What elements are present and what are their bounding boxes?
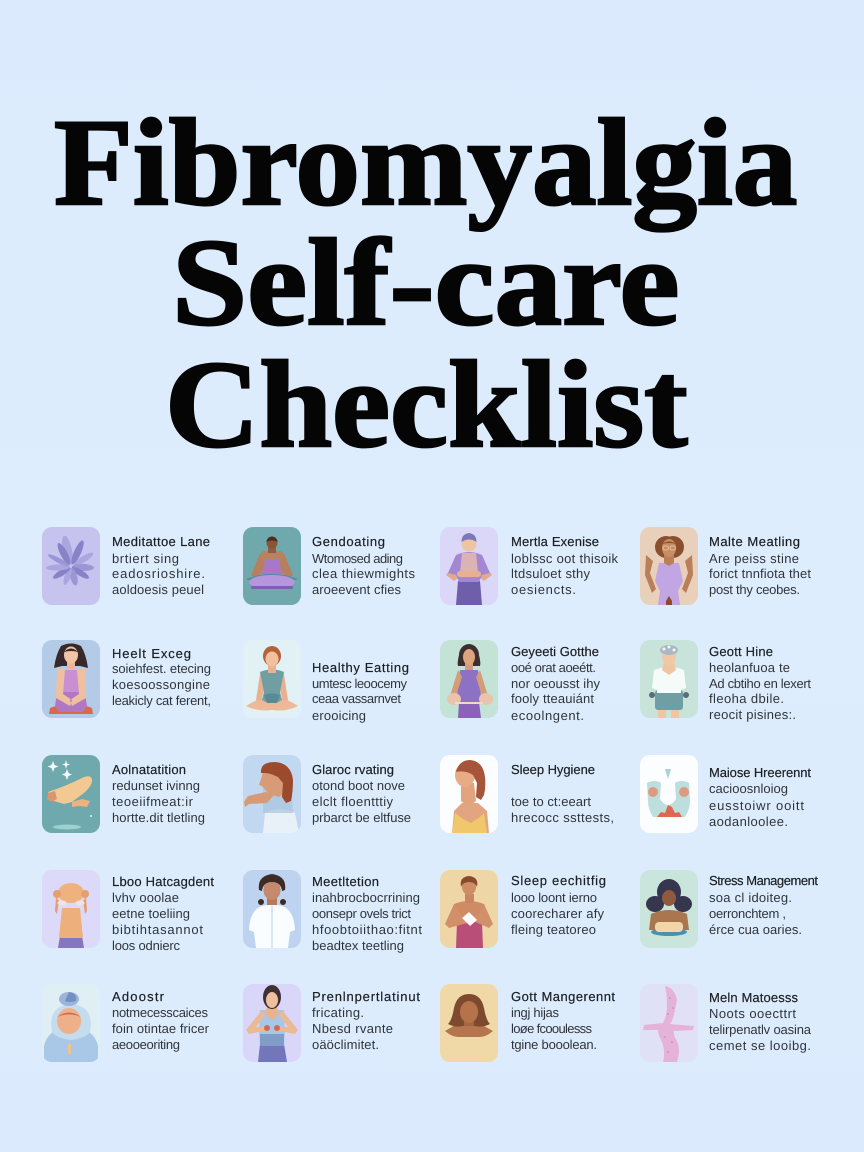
item: figure beige — [640, 527, 811, 605]
text: item 1: aoldoesis peuel — [112, 582, 204, 597]
text: item 17: foin otintae fricer — [112, 1021, 210, 1036]
item: meditation coat — [243, 870, 422, 953]
text: item 14: beadtex teetling — [312, 938, 404, 953]
text: item 7: ecoolngent. — [511, 708, 584, 723]
icon: teal bowls and coral shapes — [640, 755, 698, 833]
item: meditation flower — [42, 527, 210, 605]
item: kneeling woman — [42, 640, 211, 718]
text: item 15: looo loont ierno — [511, 890, 597, 905]
text: item 10 — [312, 762, 411, 825]
text: item 13: lvhv ooolae — [112, 890, 179, 905]
icon: hooded person with blue wrap — [42, 984, 100, 1062]
text: item 12: Maiose Hreerennt — [709, 765, 811, 780]
text: item 16: Stress Management — [709, 873, 818, 888]
text: item 13: eetne toeliing — [112, 906, 190, 921]
item: sparkle limb — [42, 755, 205, 833]
text: item 10: prbarct be eltfuse — [312, 810, 411, 825]
text: item 5: soiehfest. etecing — [112, 661, 211, 676]
text: item 4: Are peiss stine — [709, 551, 799, 566]
text: item 14 — [312, 874, 422, 953]
text: item 11 — [511, 762, 614, 825]
text: item 1 — [112, 534, 210, 597]
text: item 4: forict tnnfiota thet — [709, 566, 811, 581]
text: item 19: tgine booolean. — [511, 1037, 597, 1052]
text: item 20: telirpenatlv oasina — [709, 1022, 812, 1037]
text: item 16: oerronchtem , — [709, 906, 786, 921]
item: profile woman — [243, 755, 411, 833]
text: item 10: Glaroc rvating — [312, 762, 394, 777]
icon: peach face with hands — [42, 870, 100, 948]
text: item 11: hrecocc ssttests, — [511, 810, 614, 825]
text: item 3 — [511, 534, 618, 597]
text: item 9: redunset ivinng — [112, 778, 200, 793]
text: item 9: teoeiifmeat:ir — [112, 794, 194, 809]
text: item 7: ooé orat aoeétt. — [511, 660, 596, 675]
text: item 3: Mertla Exenise — [511, 534, 599, 549]
item: prenatal woman — [243, 984, 420, 1062]
item: hooded person — [42, 984, 210, 1062]
item: sleep scheduling — [440, 870, 606, 948]
text: item 2: Wtomosed ading — [312, 551, 403, 566]
icon: teal seated figure — [243, 527, 301, 605]
text: item 8: fleoha dbile. — [709, 691, 784, 706]
text: item 19: Gott Mangerennt — [511, 989, 615, 1004]
text: item 14: oonsepr ovels trict — [312, 906, 411, 921]
text: item 9: Aolnatatition — [112, 762, 186, 777]
item: sleep hygiene — [440, 755, 614, 833]
text: item 8: Ad cbtiho en lexert — [709, 676, 811, 691]
text: item 11: toe to ct:eeart — [511, 794, 591, 809]
text: item 20: Meln Matoesss — [709, 990, 798, 1005]
text: item 7: Geyeeti Gotthe — [511, 644, 599, 659]
text: item 4: post thy ceobes. — [709, 582, 800, 597]
icon: peach limb with sparkles — [42, 755, 100, 833]
title: Checklist — [165, 335, 688, 473]
text: item 15: coorecharer afy — [511, 906, 604, 921]
text: item 6: Healthy Eatting — [312, 660, 409, 675]
text: item 20: Noots ooecttrt — [709, 1006, 796, 1021]
icon: lavender flower — [42, 527, 100, 605]
text: item 20: cemet se looibg. — [709, 1038, 811, 1053]
text: item 12 — [709, 765, 811, 829]
title — [54, 94, 797, 473]
text: item 6: umtesc leoocemy — [312, 676, 408, 691]
icon: dark-haired woman with cushion — [640, 870, 698, 948]
text: item 18 — [312, 989, 420, 1052]
text: item 13 — [112, 874, 214, 953]
text: item 15: fleing teatoreo — [511, 922, 596, 937]
item: healthy eating — [243, 640, 409, 723]
icon: kneeling woman on red cushion — [42, 640, 100, 718]
text: item 13: bibtihtasannot — [112, 922, 203, 937]
title: Self-care — [172, 214, 679, 352]
text: item 12: aodanloolee. — [709, 814, 788, 829]
text: item 14: Meetltetion — [312, 874, 379, 889]
text: item 12: eusstoiwr ooitt — [709, 798, 804, 813]
text: item 20 — [709, 990, 812, 1053]
text: item 8 — [709, 644, 811, 722]
text: item 15 — [511, 873, 606, 937]
text: item 2: aroeevent cfies — [312, 582, 402, 597]
text: item 10: otond boot nove — [312, 778, 405, 793]
text: item 17: Adoostr — [112, 989, 165, 1004]
text: item 2: Gendoating — [312, 534, 385, 549]
text: item 16: soa cl idoiteg. — [709, 890, 792, 905]
text: item 6: ceaa vassarnvet — [312, 691, 401, 706]
text: item 8: heolanfuoa te — [709, 660, 790, 675]
icon: pink speckled ribbon — [640, 984, 698, 1062]
text: item 1: eadosrioshire. — [112, 566, 205, 581]
title: Fibromyalgia — [54, 94, 797, 231]
text: item 3: ltdsuloet sthy — [511, 566, 590, 581]
text: item 19: ingj hijas — [511, 1005, 560, 1020]
item: pink ribbon — [640, 984, 812, 1062]
text: item 1: Meditattoe Lane — [112, 534, 210, 549]
text: item 7: nor oeousst ihy — [511, 676, 600, 691]
text: item 16 — [709, 873, 818, 937]
item: gout management — [440, 984, 615, 1062]
item: figure lavender purple shirt — [440, 527, 618, 605]
item: woman holding bowls — [440, 640, 600, 723]
icon: curly-haired person in white coat — [243, 870, 301, 948]
text: item 5: koesoossongine — [112, 677, 210, 692]
text: item 3: loblssc oot thisoik — [511, 551, 618, 566]
text: item 15: Sleep eechitfig — [511, 873, 606, 888]
text: item 5 — [112, 646, 211, 708]
text: item 5: Heelt Exceg — [112, 646, 191, 661]
text: item 19: loøe fcooulesss — [511, 1021, 592, 1036]
text: item 19 — [511, 989, 615, 1052]
item: seated figure teal — [243, 527, 416, 605]
text: item 14: inahbrocbocrrining — [312, 890, 420, 905]
icon: woman in purple tank — [440, 640, 498, 718]
icon: woman in pink tank — [440, 870, 498, 948]
text: item 6 — [312, 660, 409, 723]
icon: brown-haired woman portrait — [440, 984, 498, 1062]
text: item 18: Nbesd rvante — [312, 1021, 393, 1036]
icon: woman in profile reaching — [243, 755, 301, 833]
icon: woman in yellow top — [440, 755, 498, 833]
icon: woman with headband — [440, 527, 498, 605]
text: item 8: Geott Hine — [709, 644, 773, 659]
text: item 6: erooicing — [312, 708, 366, 723]
text: item 2: clea thiewmights — [312, 566, 416, 581]
item: elderly peach figure — [42, 870, 214, 953]
icon: woman with glasses — [640, 527, 698, 605]
text: item 14: hfoobtoiithao:fitnt — [312, 922, 422, 937]
icon: grey-haired person in white shirt — [640, 640, 698, 718]
text: item 9: hortte.dit tletling — [112, 810, 205, 825]
text: item 18: oäöclimitet. — [312, 1037, 379, 1052]
text: item 3: oesiencts. — [511, 582, 576, 597]
text: item 17: aeooeoriting — [112, 1037, 180, 1052]
icon: seated woman pale background — [246, 646, 298, 710]
text: item 12: cacioosnloiog — [709, 781, 788, 796]
text: item 18: fricating. — [312, 1005, 364, 1020]
text: item 13: loos odnierc — [112, 938, 180, 953]
text: item 17 — [112, 989, 210, 1052]
text: item 17: notmecesscaices — [112, 1005, 208, 1020]
text: item 7 — [511, 644, 600, 723]
text: item 16: érce cua oaries. — [709, 922, 802, 937]
text: item 8: reocit pisines:. — [709, 707, 796, 722]
text: item 4 — [709, 534, 811, 597]
text: item 1: brtiert sing — [112, 551, 179, 566]
text: item 4: Malte Meatling — [709, 534, 800, 549]
text: item 5: leakicly cat ferent, — [112, 693, 211, 708]
item: person with shorts — [640, 640, 811, 722]
item: stress management — [640, 870, 818, 948]
text: item 11: Sleep Hygiene — [511, 762, 595, 777]
text: item 18: Prenlnpertlatinut — [312, 989, 420, 1004]
text: item 2 — [312, 534, 416, 597]
text: item 13: Lboo Hatcagdent — [112, 874, 214, 889]
item: white icon — [640, 755, 811, 833]
text: item 10: elclt floentttiy — [312, 794, 394, 809]
text: item 9 — [112, 762, 205, 825]
text: item 7: fooly tteauiánt — [511, 691, 594, 706]
icon: woman in blue top and purple skirt — [243, 984, 301, 1062]
